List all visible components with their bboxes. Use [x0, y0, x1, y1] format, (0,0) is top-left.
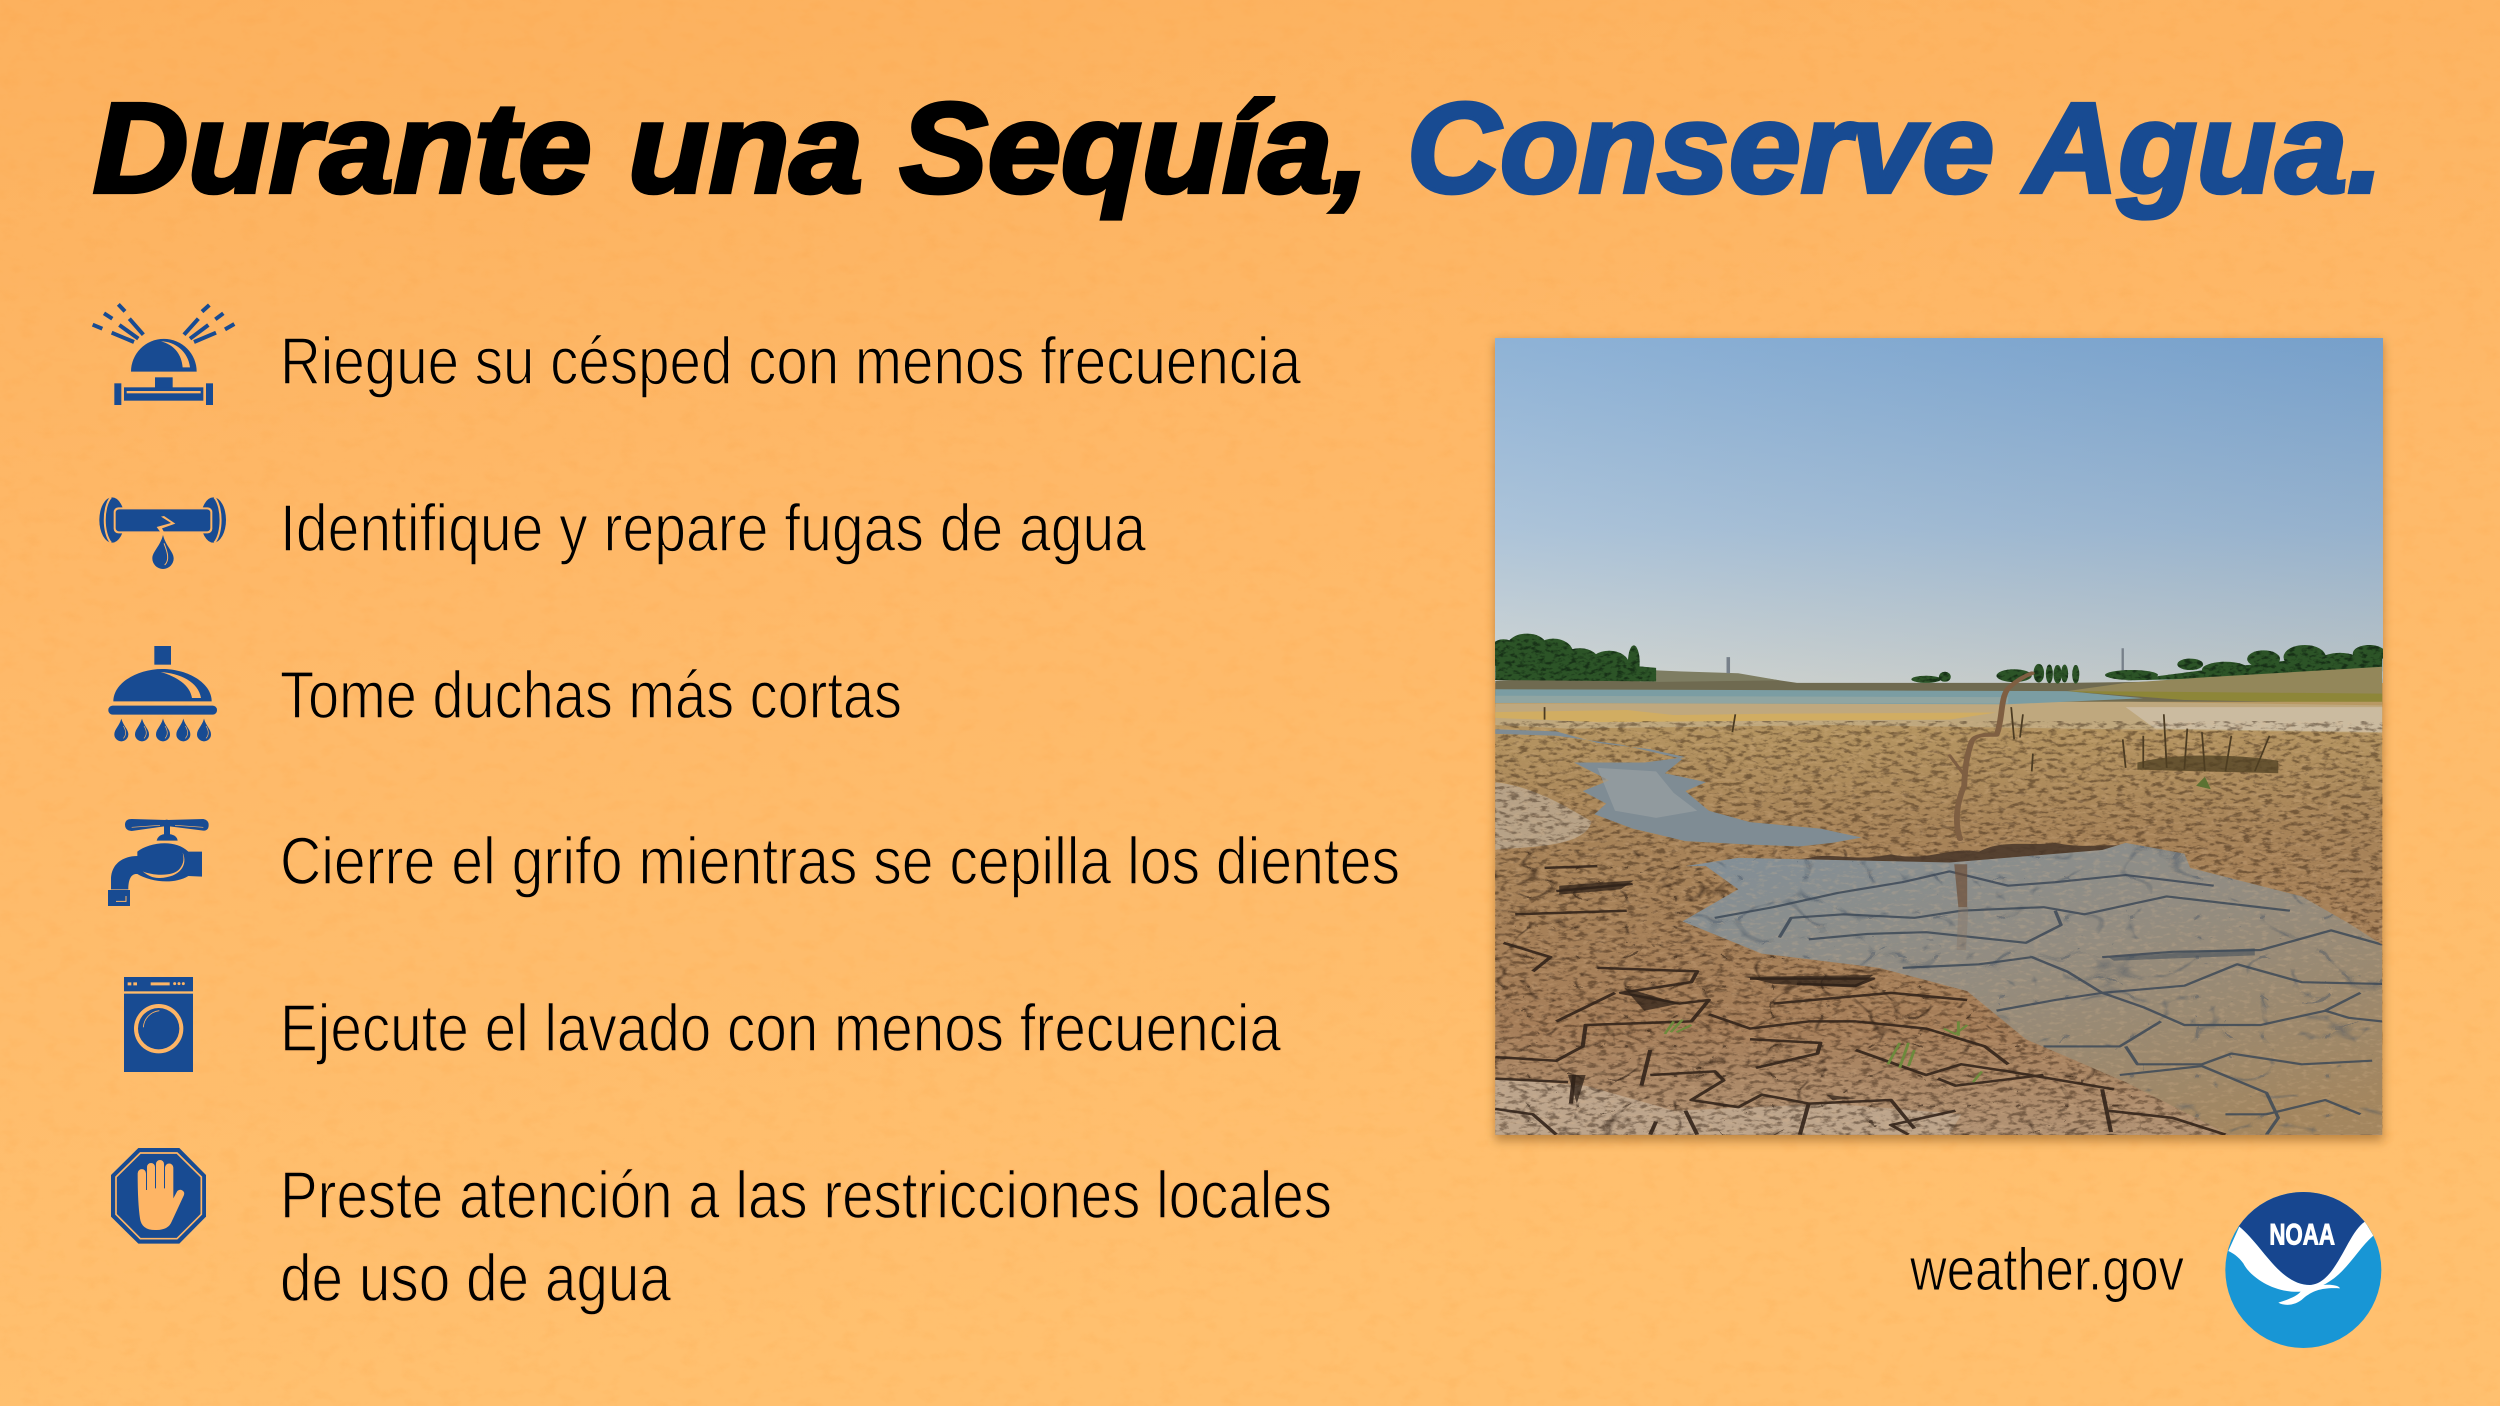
title — [93, 77, 2383, 220]
text: restrictions — [280, 1158, 1332, 1316]
NOAA logo — [2225, 1192, 2382, 1348]
stream — [1495, 729, 1862, 846]
photo shadow — [1495, 341, 2383, 1141]
logo wordmark: NOAA — [2269, 1219, 2335, 1252]
list item: shorter showers — [108, 646, 902, 741]
text: lawn: Riegue su césped con menos frecuencia — [280, 324, 1302, 399]
reeds — [1545, 707, 2269, 771]
mud cracks — [1495, 866, 2225, 1135]
icon: shower head — [108, 646, 217, 741]
branch reflection — [1954, 864, 1967, 907]
text: showers: Tome duchas más cortas — [280, 658, 902, 733]
icon: faucet — [108, 819, 209, 906]
pool cracks — [1715, 871, 2382, 1135]
dark clods — [1797, 842, 2117, 862]
list item: turn off the tap — [108, 819, 1400, 906]
text: laundry: Ejecute el lavado con menos frecuencia — [280, 991, 1282, 1066]
icon: sprinkler — [93, 304, 234, 405]
title: Durante una Sequía, — [93, 77, 1369, 220]
distant water — [1495, 689, 2143, 704]
icon: leaking pipe — [99, 497, 226, 569]
text: tap: Cierre el grifo mientras se cepilla los dientes — [280, 824, 1400, 899]
list item: laundry — [124, 977, 1282, 1072]
photo: cracked dry lakebed — [1488, 338, 2386, 1136]
list item: repair leaks — [99, 491, 1147, 569]
text: leaks: Identifique y repare fugas de agua — [280, 491, 1147, 566]
text: restrictions: Preste atención a las restricciones locales — [280, 1158, 1332, 1233]
trees — [1488, 634, 2386, 684]
website text: weather.gov — [1909, 1236, 2184, 1303]
list item: local restrictions — [111, 1148, 1332, 1316]
icon: washing machine — [124, 977, 193, 1072]
text: restrictions: de uso de agua — [280, 1241, 672, 1316]
grass tufts — [1665, 1020, 1982, 1082]
ground — [1495, 702, 2382, 1136]
icon: stop hand — [111, 1148, 206, 1244]
title: Conserve Agua. — [1407, 77, 2383, 220]
far shore — [1495, 678, 2382, 707]
dead branch — [1950, 673, 2032, 839]
list item: water the lawn — [93, 304, 1302, 405]
pool — [1683, 843, 2382, 1135]
